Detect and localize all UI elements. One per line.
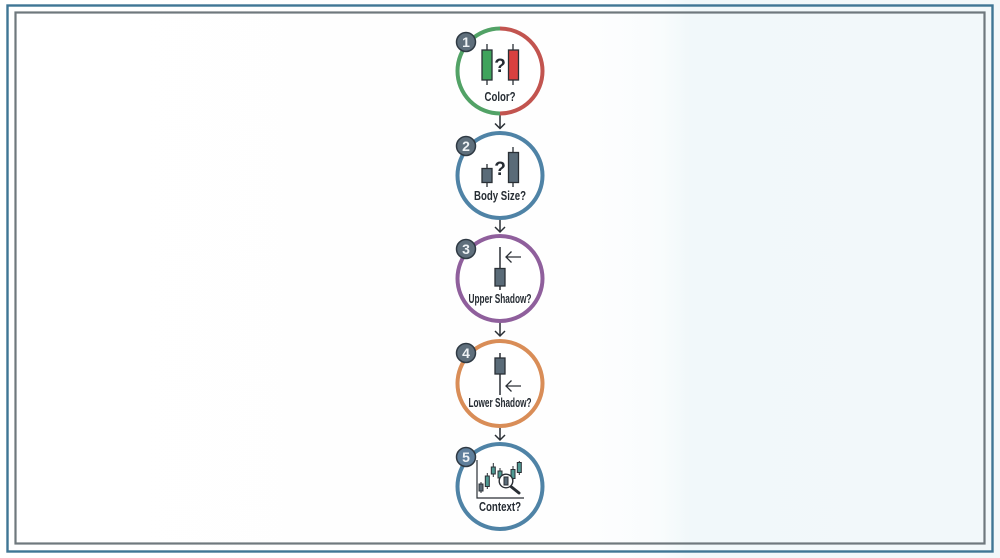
icon: small and large candles — [482, 147, 518, 187]
step 4: lower shadow — [456, 341, 542, 426]
arrow: step 4 to 5 — [495, 427, 505, 440]
arrow: step 2 to 3 — [495, 218, 505, 232]
label: Color? — [484, 90, 516, 104]
badge 2: 2 — [462, 138, 470, 154]
magnifier — [499, 474, 519, 493]
ring — [458, 133, 542, 218]
icon: candle with long upper shadow — [495, 247, 505, 290]
ring: green and red — [458, 28, 542, 114]
arrow pointer — [506, 380, 521, 392]
chart axes — [477, 460, 524, 498]
label: Context? — [479, 500, 521, 514]
label: Body Size? — [474, 189, 526, 203]
candles — [479, 461, 521, 493]
arrow: step 3 to 4 — [495, 322, 505, 336]
question mark: ? — [494, 159, 506, 180]
question mark: ? — [494, 56, 506, 77]
icon: candle with long lower shadow — [495, 353, 505, 395]
label: Lower Shadow? — [468, 396, 532, 410]
badge 5: 5 — [462, 449, 470, 465]
ring — [458, 341, 542, 426]
step 3: upper shadow — [456, 236, 542, 321]
badge 1: 1 — [462, 34, 470, 50]
arrow pointer — [506, 252, 521, 262]
badge 3: 3 — [462, 241, 470, 257]
ring — [458, 236, 542, 321]
step 1: color — [456, 28, 542, 114]
ring — [458, 444, 542, 529]
icon: green and red candles — [482, 44, 518, 85]
label: Upper Shadow? — [468, 292, 532, 306]
icon: chart with magnifier — [477, 460, 524, 498]
step 2: body size — [456, 133, 542, 218]
arrow: step 1 to 2 — [495, 114, 505, 128]
badge 4: 4 — [462, 345, 470, 361]
step 5: context — [456, 444, 542, 529]
